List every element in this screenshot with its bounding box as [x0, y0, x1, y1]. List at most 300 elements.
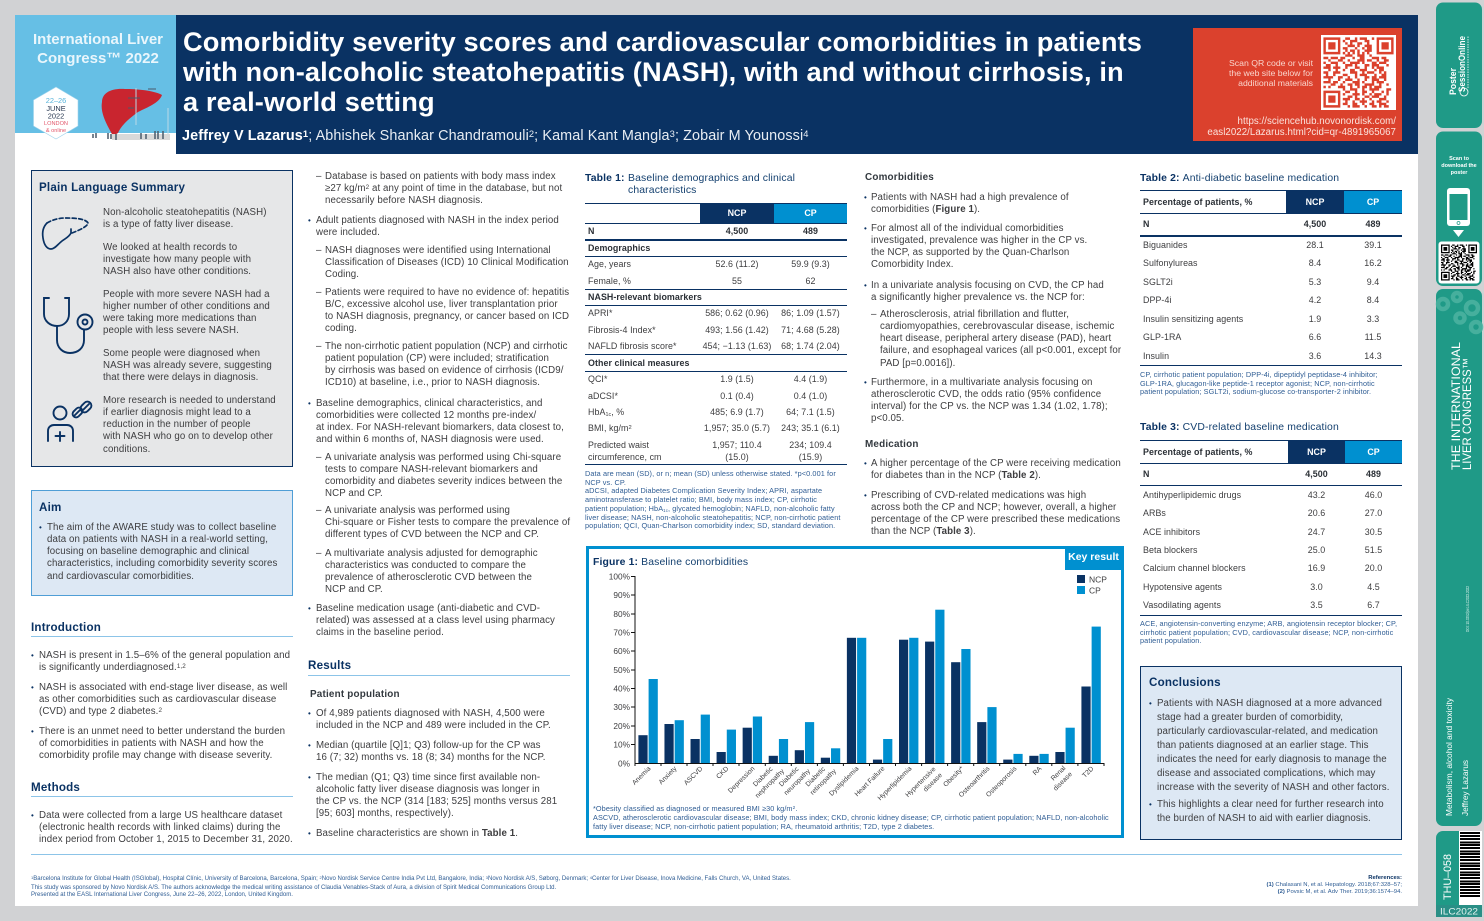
decorative cells — [1438, 293, 1481, 332]
sub-bullet: heart disease, peripheral artery disease (PAD), heart — [880, 333, 1111, 344]
bullet: indicates the need for early diagnosis to manage the — [1157, 754, 1387, 765]
paragraph: NASH was already severe, suggesting — [103, 360, 272, 371]
x-axis labels: CKD — [715, 765, 730, 781]
bullet — [864, 280, 1104, 304]
bars: CP — [649, 610, 1101, 763]
bullet: NASH is associated with end-stage liver disease, as well — [39, 682, 287, 693]
paragraph: were taking more medications than — [103, 313, 257, 324]
NCP header: NCP — [1307, 447, 1326, 457]
row — [588, 423, 840, 433]
NCP header — [1286, 191, 1344, 213]
table 3 notes: ACE, angiotensin-converting enzyme; ARB, angiotensin receptor blocker; CP, — [1140, 619, 1397, 628]
bullet: atherosclerotic CVD, the odds ratio (95% confidence — [871, 389, 1101, 400]
row: NAFLD fibrosis score* — [588, 341, 677, 351]
row: Insulin sensitizing agents — [1143, 314, 1243, 324]
table 3 notes — [1140, 620, 1397, 646]
x-axis labels: Diabetic — [752, 766, 775, 788]
table 2 notes: patient population; SGLT2i, sodium-glucose co-transporter-2 inhibitor. — [1140, 387, 1371, 396]
x-axis labels: Depression — [727, 765, 757, 795]
panel: plain language summary — [31, 170, 293, 467]
row: 9.4 — [1367, 277, 1379, 287]
section: introduction — [31, 621, 293, 761]
table 2 notes: CP, cirrhotic patient population; DPP-4i, dipeptidyl peptidase-4 inhibitor; — [1140, 370, 1378, 379]
row: 454; −1.13 (1.63) — [703, 341, 771, 351]
bullet — [308, 398, 564, 447]
row: aDCSI* — [588, 391, 618, 401]
bullet: This highlights a clear need for further research into — [1157, 799, 1384, 810]
sub-bullet: Coding. — [325, 269, 359, 280]
sub-bullet: tests to compare NASH-relevant biomarkers and — [325, 464, 538, 475]
row: Female, % — [588, 276, 631, 286]
sub-bullet — [316, 171, 562, 207]
bullet — [308, 603, 555, 639]
row — [588, 325, 840, 335]
footer: references: (2) Povsic M, et al. Adv Ther. 2019;36:1574–94. — [1278, 889, 1402, 895]
row: BMI, kg/m2 — [588, 423, 632, 433]
icon: QR code — [1321, 35, 1396, 110]
panel: aim — [31, 490, 293, 596]
row: 485; 6.9 (1.7) — [710, 407, 764, 417]
x-axis labels: Dyslipidemia — [828, 765, 861, 798]
y-axis labels: 10% — [613, 740, 631, 750]
row — [588, 259, 830, 269]
CP header: CP — [1367, 197, 1379, 207]
row — [1140, 507, 1402, 519]
row: Hypotensive agents — [1143, 582, 1222, 592]
row — [588, 276, 816, 286]
paragraph: More research is needed to understand — [103, 395, 276, 406]
bullet: a significantly higher prevalence vs. the NCP for: — [871, 292, 1085, 303]
row: 4.2 — [1309, 295, 1321, 305]
row — [1140, 239, 1402, 251]
aim text: characteristics, including comorbidity severity scores — [47, 558, 277, 569]
paragraph: Some people were diagnosed when — [103, 348, 260, 359]
row: QCI* — [588, 374, 607, 384]
bullet: p<0.05. — [871, 413, 904, 424]
row: 6.7 — [1367, 600, 1380, 610]
bullet: (electronic health records with linked claims) during the — [39, 822, 281, 833]
heading: comorbidities: Comorbidities — [865, 172, 934, 183]
bullet: index period from October 1, 2015 to December 31, 2020. — [39, 834, 293, 845]
row: Biguanides — [1143, 240, 1188, 250]
bullet: claims in the baseline period. — [316, 627, 444, 638]
bullet: (CVD) and type 2 diabetes.2 — [39, 706, 162, 717]
row — [1140, 331, 1402, 343]
x-axis labels: Osteoporosis — [985, 765, 1019, 799]
sub-bullet: Patients were required to have no evidence of: hepatitis — [325, 287, 569, 298]
title: Comorbidity severity scores and cardiovascular comorbidities in patients — [183, 26, 1142, 57]
row: 55 — [732, 276, 742, 286]
CP header — [774, 204, 847, 224]
axes — [631, 576, 1104, 766]
authors: Jeffrey V Lazarus1; Abhishek Shankar Chandramouli2; Kamal Kant Mangla3; Zobair M Younossi4 — [182, 128, 809, 144]
x-axis labels: Hypertensive — [904, 766, 938, 799]
QR instructions: the web site below for — [1229, 68, 1313, 78]
heading: Plain Language Summary — [39, 181, 185, 194]
row — [1140, 276, 1402, 288]
sub-bullet: NCP and CP. — [325, 584, 383, 595]
congress name — [33, 31, 163, 67]
panel: poster session online: SessionOnline — [1457, 36, 1467, 92]
table 1 title — [585, 172, 795, 196]
navy title panel — [176, 15, 1418, 154]
acknowledgements: This study was sponsored by Novo Nordisk A/S. The authors acknowledge the medical writing assistance of Claudia Venables-Stack of Aura, a division of Spirit Medical Communications Group Ltd. — [31, 884, 556, 890]
row: Sulfonylureas — [1143, 258, 1198, 268]
row: HbA1c, % — [588, 407, 624, 418]
icon: liver illustration — [93, 88, 170, 140]
sub-bullet: coding. — [325, 323, 357, 334]
y-axis labels — [609, 572, 631, 768]
CP header: CP — [1367, 447, 1380, 457]
paragraph: We looked at health records to — [103, 242, 237, 253]
bullet: comorbidity profile may change with disease severity. — [39, 750, 272, 761]
row — [1140, 294, 1402, 306]
paragraph: if earlier diagnosis might lead to a — [103, 407, 251, 418]
bullet: at index. For NASH-relevant biomarkers, data closest to, — [316, 422, 564, 433]
bullet — [864, 223, 1087, 272]
sub-bullet — [316, 452, 562, 501]
paragraph — [103, 395, 276, 455]
row: 243; 35.1 (6.1) — [781, 423, 840, 433]
row: 51.5 — [1365, 545, 1382, 555]
panel: poster session online — [1436, 2, 1482, 128]
row — [1140, 599, 1402, 611]
paragraph: reduction in the number of people — [103, 419, 251, 430]
row — [588, 226, 818, 236]
section: methods — [31, 781, 293, 845]
row: 86; 1.09 (1.57) — [781, 308, 840, 318]
row — [1140, 581, 1402, 593]
bullet: and within 6 months of, NASH diagnosis were used. — [316, 434, 544, 445]
bullet: comorbidities were collected 12 months pre-index/ — [316, 410, 536, 421]
x-axis labels: ASCVD — [683, 765, 704, 787]
bullet: for diabetes than in the NCP (Table 2). — [871, 470, 1041, 481]
bullet: Patients with NASH diagnosed at a more advanced — [1157, 698, 1382, 709]
URL: easl2022/Lazarus.html?cid=qr-4891965067 — [1207, 127, 1396, 138]
figure notes — [593, 805, 1109, 831]
y-axis labels: 60% — [613, 646, 631, 656]
bullet: the NCP, as supported by the Quan-Charlson — [871, 247, 1069, 258]
row: 30.5 — [1365, 527, 1382, 537]
paragraph — [103, 348, 272, 383]
bullet: as other comorbidities such as cardiovascular disease — [39, 694, 276, 705]
table 1 notes: aminotransferase to platelet ratio; BMI, body mass index; CP, cirrhotic — [585, 495, 817, 504]
row: 4.5 — [1367, 582, 1380, 592]
y-axis labels: 0% — [618, 758, 631, 768]
aim text — [39, 522, 277, 583]
sub-bullet: necessarily before NASH diagnosis. — [325, 195, 483, 206]
legend: CP — [1089, 586, 1101, 596]
x-axis labels: Hyperlipidemia — [877, 765, 914, 802]
bullet — [31, 810, 293, 846]
panel: international liver congress — [1436, 289, 1482, 826]
bullet: [95; 603] months, respectively). — [316, 808, 454, 819]
sub-bullet: by cirrhosis was based on evidence of cirrhosis (ICD9/ — [325, 365, 564, 376]
row: 71; 4.68 (5.28) — [781, 325, 840, 335]
plain language text — [103, 207, 276, 455]
paragraph: that there were delays in diagnosis. — [103, 372, 258, 383]
row: DPP-4i — [1143, 295, 1171, 305]
heading: Methods — [31, 781, 80, 794]
bullet: than the NCP (Table 3). — [871, 526, 976, 537]
sub-bullet: The non-cirrhotic patient population (NCP) and cirrhotic — [325, 341, 568, 352]
bullet: The median (Q1; Q3) time since first available non- — [316, 772, 540, 783]
panel: poster session online: Poster — [1448, 68, 1458, 95]
CP header: CP — [804, 208, 817, 218]
table 3 title: Table 3: CVD-related baseline medication — [1140, 422, 1339, 432]
bullet: the CP vs. the NCP (314 [183; 525] months versus 281 — [316, 796, 557, 807]
row — [588, 374, 827, 384]
row: 1.9 — [1309, 314, 1321, 324]
row: 489 — [803, 226, 818, 236]
x-axis labels: Diabetic — [805, 766, 827, 788]
table 2 notes — [1140, 371, 1378, 397]
aim text: focusing on baseline demographic and clinical — [47, 546, 249, 557]
CP header — [1345, 441, 1402, 463]
bullet: percentage of the CP were prescribed these medications — [871, 514, 1120, 525]
row: 4,500 — [726, 226, 748, 236]
sub-bullet: patient population (CP) were included; stratification — [325, 353, 549, 364]
row: Fibrosis-4 Index* — [588, 325, 656, 335]
panel: international liver congress: LIVER CONGRESS™ — [1460, 358, 1474, 470]
table 1 notes: patient population; HbA1c, glycated hemoglobin; NAFLD, non-alcoholic fatty — [585, 504, 835, 513]
row: Age, years — [588, 259, 631, 269]
table 1 title: Table 1: — [585, 172, 625, 184]
row: 14.3 — [1364, 351, 1382, 361]
footer: references: (1) Chalasani N, et al. Hepatology. 2018;67:328–57; — [1267, 882, 1402, 888]
row: 4,500 — [1305, 469, 1328, 479]
row: 64; 7.1 (1.5) — [786, 407, 835, 417]
row: Other clinical measures — [588, 358, 690, 368]
bullet — [308, 772, 557, 821]
row: Antihyperlipidemic drugs — [1143, 490, 1241, 500]
QR instructions: additional materials — [1238, 78, 1313, 88]
row: Demographics — [588, 243, 650, 253]
y-axis labels: 70% — [613, 628, 631, 638]
panel: figure 1 — [586, 546, 1124, 838]
bullet — [1149, 697, 1390, 795]
x-axis labels: neuropathy — [783, 768, 812, 797]
bars: NCP — [638, 638, 1091, 763]
row: 43.2 — [1308, 490, 1325, 500]
row: 6.6 — [1309, 332, 1321, 342]
panel: international liver congress: Metabolism, alcohol and toxicity — [1444, 697, 1454, 816]
row: 1.9 (1.5) — [720, 374, 754, 384]
table 1 notes: liver disease; NASH, non-alcoholic steatohepatitis; NCP, non-cirrhotic patient — [585, 513, 840, 522]
row: 5.3 — [1309, 277, 1321, 287]
footer: references — [1267, 875, 1402, 897]
row: 8.4 — [1367, 295, 1379, 305]
congress logo panel — [15, 15, 176, 140]
row — [1140, 350, 1402, 362]
icon: date hexagon: 2022 — [48, 112, 64, 120]
acknowledgements — [31, 884, 556, 900]
bullet: Baseline medication usage (anti-diabetic and CVD- — [316, 603, 540, 614]
bullet — [31, 726, 285, 762]
bullet: NASH is present in 1.5–6% of the general population and — [39, 650, 290, 661]
row — [588, 440, 832, 462]
table 2 title: Table 2: Anti-diabetic baseline medication — [1140, 172, 1339, 184]
legend: NCP — [1089, 574, 1107, 584]
bullet: There is an unmet need to better understand the burden — [39, 726, 285, 737]
bullet — [31, 650, 290, 674]
heading: Conclusions — [1149, 676, 1221, 689]
text: Baseline demographics and clinical — [628, 172, 795, 184]
table 2: anti-diabetic medication — [1140, 190, 1402, 366]
row — [588, 341, 840, 351]
paragraph: People with more severe NASH had a — [103, 289, 270, 300]
y-axis labels: 40% — [613, 684, 631, 694]
bullet: Furthermore, in a multivariate analysis focusing on — [871, 377, 1093, 388]
bullet: Median (quartile [Q]1; Q3) follow-up for the CP was — [316, 740, 541, 751]
header banner — [15, 15, 1418, 154]
row — [588, 308, 840, 318]
title — [182, 26, 1142, 117]
y-axis labels: 50% — [613, 665, 631, 675]
sub-bullet: NCP and CP. — [325, 488, 383, 499]
key result tab — [1065, 548, 1122, 570]
icon: date hexagon — [34, 87, 78, 139]
bullet: Baseline demographics, clinical characteristics, and — [316, 398, 543, 409]
bullet: 16 (7; 32) months vs. 18 (8; 34) months for the NCP. — [316, 752, 546, 763]
bullet: alcoholic fatty liver disease diagnosis was longer in — [316, 784, 540, 795]
sub-bullet — [316, 505, 570, 541]
sub-bullet: B/C, excessive alcohol use, liver transplantation prior — [325, 299, 558, 310]
row — [1140, 526, 1402, 538]
bullet: Patients with NASH had a high prevalence of — [871, 192, 1069, 203]
URL: https://sciencehub.novonordisk.com/ — [1238, 116, 1396, 127]
QR callout — [1193, 28, 1402, 141]
row: 1,957; 110.4 — [712, 440, 762, 450]
bullet: A higher percentage of the CP were receiving medication — [871, 458, 1121, 469]
row: ACE inhibitors — [1143, 527, 1200, 537]
heading: Introduction — [31, 621, 101, 634]
sub-bullet: Database is based on patients with body mass index — [325, 171, 556, 182]
paragraph — [103, 289, 270, 336]
bullet: related) was assessed at a class level using pharmacy — [316, 615, 555, 626]
row: ARBs — [1143, 508, 1166, 518]
panel: international liver congress: DOI: 10.3252/pwc.ILC2022.2022 — [1465, 586, 1470, 632]
row: 3.0 — [1310, 582, 1323, 592]
sub-bullet: prevalence of atherosclerotic CVD between the — [325, 572, 532, 583]
congress name: International Liver — [33, 31, 163, 48]
row: 16.2 — [1364, 258, 1382, 268]
footer: references: References: — [1368, 875, 1402, 881]
icon: date hexagon: LONDON — [44, 121, 68, 127]
icon: liver — [42, 217, 89, 250]
heading: Aim — [39, 501, 62, 514]
sidebar: e-poster strip — [1430, 0, 1484, 921]
congress name: Congress™ 2022 — [37, 50, 159, 67]
figure notes: *Obesity classified as diagnosed or measured BMI ≥30 kg/m2. — [593, 804, 797, 813]
title: a real-world setting — [183, 86, 435, 117]
panel: international liver congress: Jeffrey Lazarus — [1460, 760, 1470, 816]
sub-bullet: NASH diagnoses were identified using International — [325, 245, 551, 256]
NCP header — [1288, 441, 1345, 463]
x-axis labels: Heart Failure — [854, 765, 887, 798]
table 1 notes: NCP vs. CP. — [585, 478, 626, 487]
row — [1140, 468, 1402, 480]
icon: date hexagon: 22–26 — [46, 96, 66, 105]
y-axis labels: 20% — [613, 721, 631, 731]
table 1 notes — [585, 469, 840, 530]
acknowledgements: Presented at the EASL International Liver Congress, June 22–26, 2022, London, United Kingdom. — [31, 892, 293, 898]
bullet: increase with the severity of NASH and other factors. — [1157, 782, 1390, 793]
row — [1140, 562, 1402, 574]
row: 1,957; 35.0 (5.7) — [704, 423, 770, 433]
row: 59.9 (9.3) — [791, 259, 830, 269]
section: results — [308, 659, 570, 839]
sub-bullet: PAD [p=0.0016]). — [880, 358, 955, 369]
row: (15.9) — [799, 452, 822, 462]
x-axis labels — [631, 765, 1095, 802]
x-axis labels: disease — [922, 772, 944, 793]
sub-bullet — [316, 287, 569, 336]
y-axis labels: 100% — [609, 572, 631, 582]
text: characteristics — [628, 184, 697, 196]
icon: date hexagon: JUNE — [46, 104, 66, 113]
footer: affiliations and acknowledgements — [31, 875, 791, 903]
table 1: baseline demographics — [585, 203, 847, 465]
bullet: stage had a greater burden of comorbidity, — [1157, 712, 1343, 723]
column: methods continued — [308, 171, 570, 638]
row: 52.6 (11.2) — [716, 259, 758, 269]
NCP header — [700, 204, 774, 224]
row: 3.3 — [1367, 314, 1379, 324]
icon: QR code — [1438, 242, 1480, 284]
CP header — [1344, 191, 1402, 213]
y-axis labels: 30% — [613, 702, 631, 712]
key result tab: Key result — [1068, 551, 1119, 563]
row: 489 — [1366, 469, 1381, 479]
x-axis labels: Renal — [1050, 765, 1068, 782]
row: N — [1143, 469, 1149, 479]
row: 20.0 — [1365, 563, 1382, 573]
x-axis labels: Diabetic — [778, 766, 801, 788]
subheading: patient population: Patient population — [310, 689, 400, 700]
row: 586; 0.62 (0.96) — [705, 308, 769, 318]
bullet: Of 4,989 patients diagnosed with NASH, 4,500 were — [316, 708, 545, 719]
row: SGLT2i — [1143, 277, 1173, 287]
panel: poster number and barcode: ILC2022 — [1440, 906, 1478, 916]
bullet — [308, 215, 559, 239]
bullet: investigated, prevalence was higher in the CP vs. — [871, 235, 1087, 246]
y-axis labels: 90% — [613, 590, 631, 600]
heading: Results — [308, 659, 351, 672]
bullet — [864, 377, 1108, 426]
row: 27.0 — [1365, 508, 1382, 518]
paragraph: investigate how many people with — [103, 254, 251, 265]
x-axis labels: Osteoarthritis — [958, 765, 992, 799]
sub-bullet: cardiomyopathies, cerebrovascular disease, ischemic — [880, 321, 1114, 332]
icon: phone — [1447, 188, 1470, 237]
bullet — [308, 708, 551, 732]
row: Calcium channel blockers — [1143, 563, 1246, 573]
paragraph: NASH also have other conditions. — [103, 266, 251, 277]
panel: scan to download: poster — [1451, 170, 1468, 176]
figure notes: ASCVD, atherosclerotic cardiovascular disease; BMI, body mass index; CKD, chronic kidney disease; CP, cirrhotic patient population; NAFLD, non-alcoholic — [593, 813, 1109, 822]
legend — [1077, 574, 1107, 596]
sub-bullet: different types of CVD between the NCP and CP. — [325, 529, 539, 540]
table 1 notes: aDCSI, adapted Diabetes Complication Severity Index; APRI, aspartate — [585, 486, 822, 495]
bullet: Comorbidity Index. — [871, 259, 954, 270]
panel: conclusions — [1140, 666, 1402, 840]
panel: scan to download: Scan to — [1449, 156, 1470, 162]
NCP header: NCP — [1306, 197, 1324, 207]
row: 39.1 — [1364, 240, 1382, 250]
row: 489 — [1366, 219, 1380, 229]
row: N — [1143, 219, 1149, 229]
